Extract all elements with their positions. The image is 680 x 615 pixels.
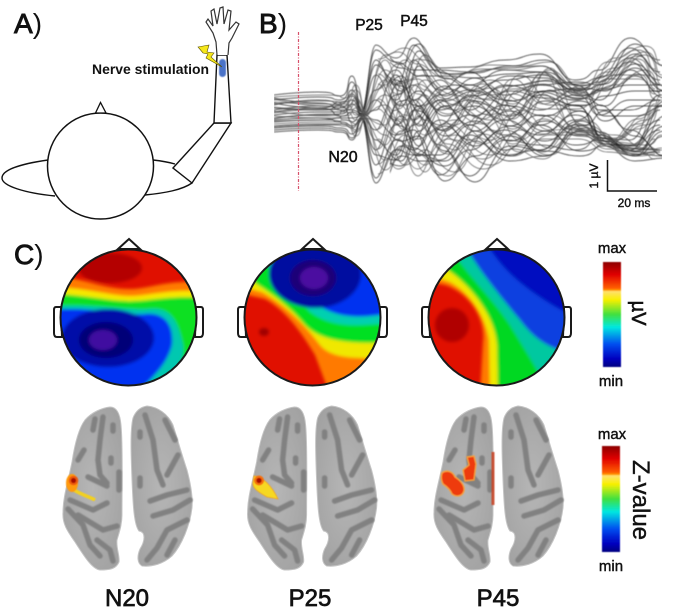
icon: nose (96, 102, 106, 113)
unit label: Z-value (627, 460, 654, 540)
scale label 1 µV: 1 µV (587, 164, 601, 188)
stimulus onset marker (298, 32, 300, 191)
icon: outstretched left arm (2, 160, 55, 196)
topographic map N20 (53, 238, 204, 386)
brain surface N20 (63, 406, 192, 570)
topographic map P25 (235, 239, 395, 395)
scale bar (608, 160, 657, 191)
column label N20: N20 (105, 585, 149, 612)
colour scale: µV (598, 240, 649, 390)
label min: min (599, 558, 623, 575)
waveform traces (267, 38, 665, 189)
panel B: evoked potential butterfly plot (267, 13, 665, 210)
column label P25: P25 (289, 585, 331, 612)
label min: min (599, 373, 623, 390)
scale label 20 ms: 20 ms (618, 196, 650, 210)
label: nerve stimulation: Nerve stimulation (92, 62, 209, 77)
brain surface P45 (434, 406, 563, 570)
colour scale: Z-value (598, 426, 654, 575)
colour bar (602, 446, 620, 552)
icon: upper arm (173, 123, 231, 183)
label max: max (598, 240, 627, 257)
icon: head from above (48, 113, 154, 219)
panel label C: C) (14, 239, 44, 270)
icon: lightning bolt (198, 45, 222, 67)
brain surface P25 (247, 406, 377, 570)
source activation P25 (253, 476, 278, 499)
label max: max (598, 426, 627, 443)
source activation N20 (66, 474, 95, 500)
panel label B: B) (259, 8, 287, 39)
icon: right shoulder (145, 160, 192, 195)
panel label A: A) (14, 8, 42, 39)
column label P45: P45 (477, 585, 519, 612)
peak label N20: N20 (328, 149, 358, 166)
colour bar (603, 262, 621, 367)
icon: forearm (214, 55, 231, 123)
peak label P25: P25 (355, 17, 383, 34)
unit label: µV (627, 301, 649, 326)
topographic map P45 (420, 239, 580, 395)
icon: hand (206, 7, 239, 55)
panel A: body diagram (2, 7, 239, 219)
peak label P45: P45 (400, 13, 428, 30)
icon: stimulation electrode (219, 59, 226, 77)
source activation P45 (441, 452, 493, 505)
